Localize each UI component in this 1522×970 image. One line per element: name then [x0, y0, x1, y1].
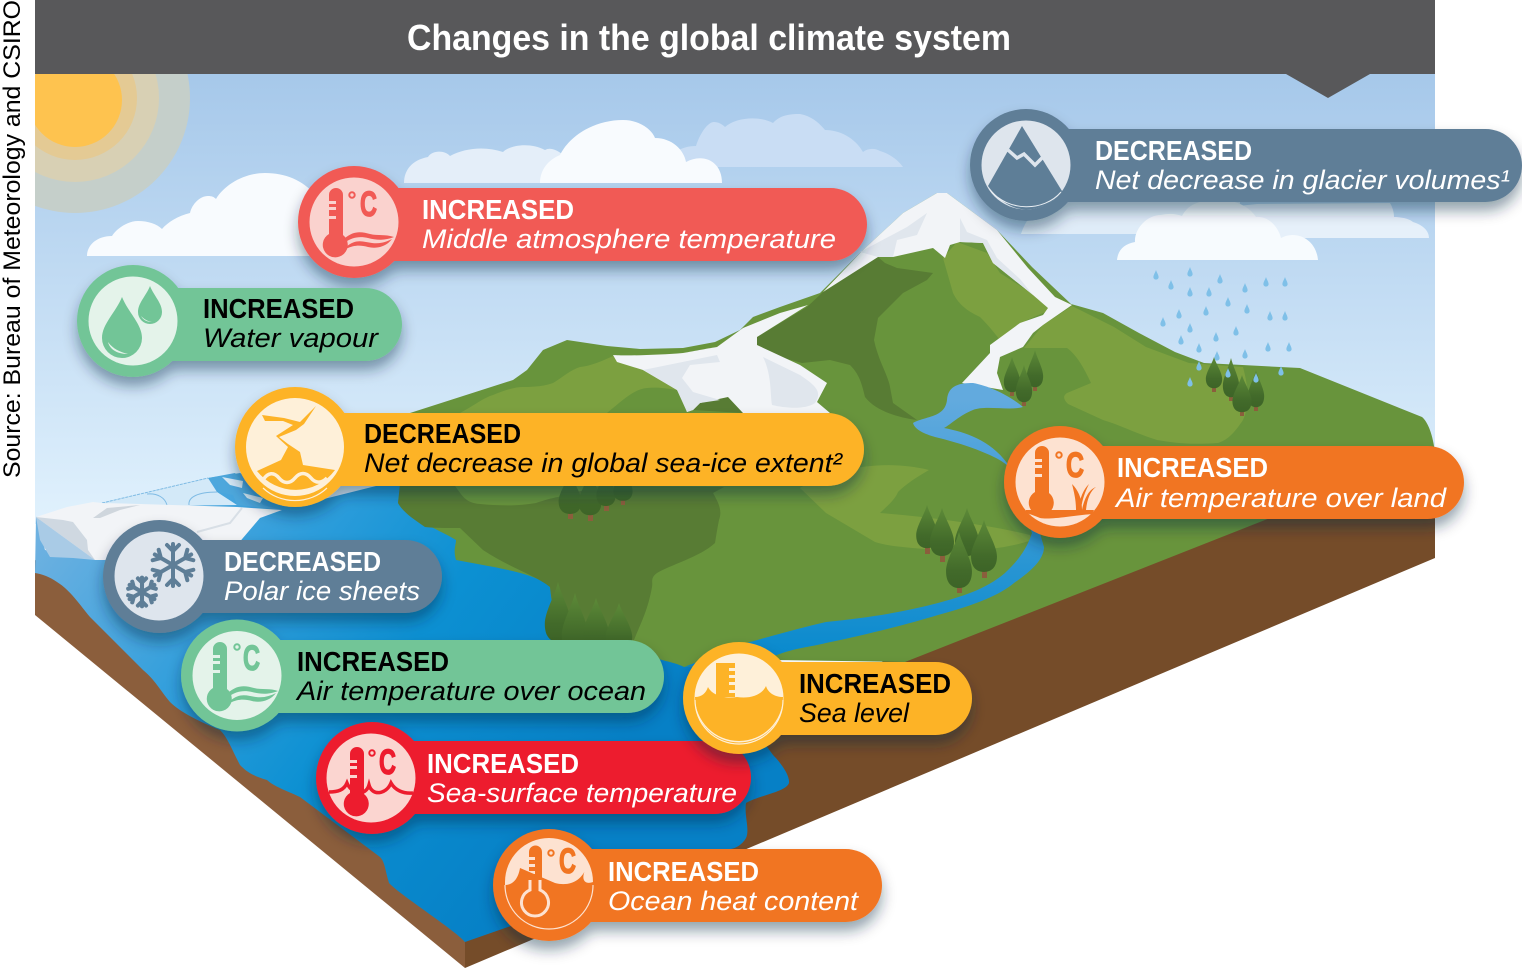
land — [398, 193, 1435, 667]
badge: water vapour: INCREASED — [203, 293, 354, 324]
icon: mountain — [982, 120, 1070, 210]
badge: sea surface temperature — [316, 722, 751, 834]
badge: ocean heat content: Ocean heat content — [608, 886, 860, 916]
snow caps — [823, 193, 1072, 390]
sky background — [35, 74, 1435, 524]
title bar — [35, 0, 1435, 98]
badge: ocean heat content: INCREASED — [608, 856, 759, 887]
badge: water vapour: Water vapour — [203, 323, 379, 353]
icon: thermometer with air swirls: C — [360, 185, 377, 224]
badge: glacier volumes: DECREASED — [1095, 135, 1252, 166]
icon: snowflakes — [114, 532, 204, 620]
badge: sea surface temperature: Sea-surface temperature — [427, 778, 737, 808]
lower rain drops over trees — [1187, 361, 1284, 387]
badge: middle atmosphere temperature — [298, 166, 867, 278]
badge: air temperature over land: INCREASED — [1117, 452, 1268, 483]
icon: thermometer with swirls — [192, 631, 282, 720]
badge: sea level: Sea level — [799, 698, 910, 728]
trees — [545, 350, 1264, 653]
badge: sea level — [683, 642, 972, 754]
badge: air temperature over ocean — [181, 620, 664, 732]
icon: thermometer with air swirls — [310, 178, 398, 266]
river and lake — [684, 383, 1044, 667]
badge: polar ice sheets: Polar ice sheets — [224, 576, 420, 606]
icon: thermometer with grass: C — [1066, 446, 1084, 485]
dark terrain patches — [757, 257, 933, 420]
badge: glacier volumes — [970, 109, 1522, 221]
sea ice and shelf — [36, 473, 282, 560]
title text: Changes in the global climate system — [407, 17, 1011, 58]
badge: middle atmosphere temperature: Middle atmosphere temperature — [422, 224, 836, 254]
sun with halo rings — [35, 74, 190, 213]
badge: global sea-ice extent — [235, 387, 864, 507]
sea — [35, 473, 789, 942]
badge: glacier volumes: Net decrease in glacier volumes¹ — [1095, 165, 1510, 195]
badge: global sea-ice extent: Net decrease in global sea-ice extent² — [364, 448, 843, 478]
badge: air temperature over ocean: INCREASED — [297, 646, 449, 677]
badge: ocean heat content — [493, 829, 882, 941]
badge: polar ice sheets — [103, 520, 442, 633]
badge: middle atmosphere temperature: INCREASED — [422, 194, 574, 225]
icon: cracked sea ice — [246, 398, 344, 501]
icon: thermometer under ocean — [505, 838, 593, 929]
badge: air temperature over ocean: Air temperature over ocean — [295, 676, 646, 706]
rain drops — [1153, 267, 1292, 361]
badge: water vapour — [77, 265, 402, 377]
badge: sea surface temperature: INCREASED — [427, 748, 579, 779]
icon: thermometer in water: C — [379, 743, 396, 782]
badge: polar ice sheets: DECREASED — [224, 546, 381, 577]
icon: thermometer in water — [326, 734, 416, 822]
icon: tide gauge and waves — [694, 654, 784, 744]
brown earth block — [35, 455, 1435, 968]
icon: thermometer with swirls: C — [243, 639, 260, 678]
icon: water drops — [88, 276, 178, 366]
clouds — [87, 114, 1429, 260]
badge: air temperature over land: Air temperature over land — [1114, 483, 1447, 513]
badge: sea level: INCREASED — [799, 668, 951, 699]
badge: global sea-ice extent: DECREASED — [364, 418, 521, 449]
light terrain patches — [1024, 306, 1248, 444]
badge: air temperature over land — [1004, 426, 1464, 538]
icon: thermometer with grass — [1016, 438, 1104, 526]
icon: thermometer under ocean: C — [559, 842, 576, 881]
